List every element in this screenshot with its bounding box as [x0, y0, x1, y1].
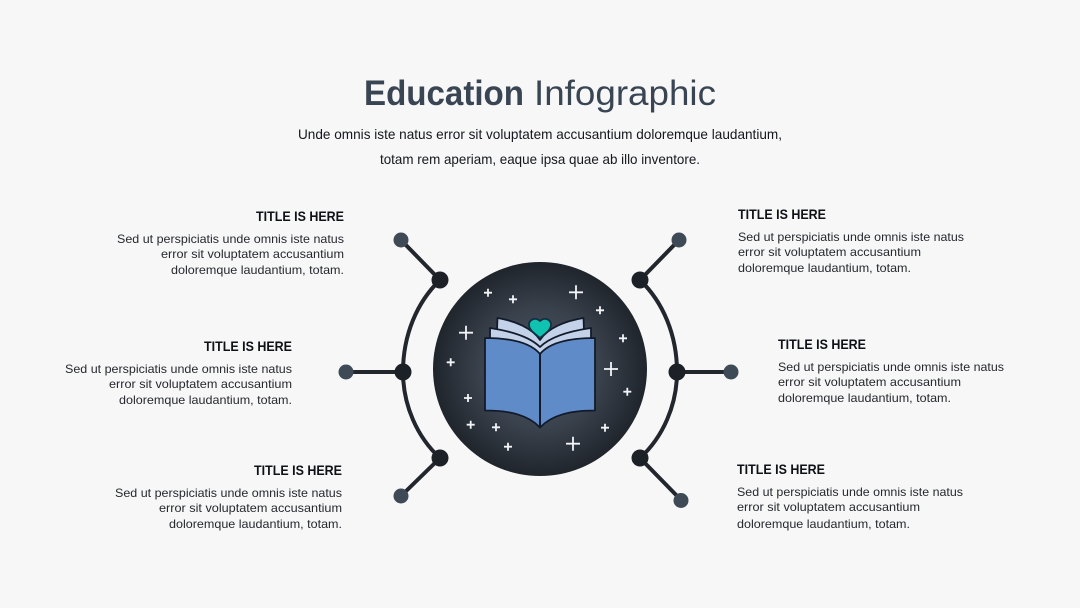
item: bottom right	[737, 461, 963, 531]
item: bottom left: Sed ut perspiciatis unde omnis iste natus	[115, 486, 342, 500]
right connector arc with branches	[632, 232, 738, 508]
item: middle right: TITLE IS HERE	[778, 336, 866, 352]
item: middle left	[65, 338, 292, 407]
item: middle right: error sit voluptatem accusantium	[778, 375, 961, 389]
item: middle right: doloremque laudantium, totam.	[778, 391, 951, 405]
item: bottom left: error sit voluptatem accusantium	[159, 501, 342, 515]
book cover pages	[485, 338, 595, 428]
icon: sparkles	[447, 285, 631, 451]
left connector arc with branches	[338, 232, 448, 504]
item: bottom left: doloremque laudantium, totam.	[169, 517, 342, 531]
item: middle right	[778, 336, 1004, 405]
item: bottom right: TITLE IS HERE	[737, 461, 825, 477]
back pages	[490, 318, 591, 356]
item: top right: doloremque laudantium, totam.	[738, 261, 911, 275]
item: top left	[117, 208, 344, 277]
item: bottom right: error sit voluptatem accusantium	[737, 500, 920, 514]
item: top left: Sed ut perspiciatis unde omnis iste natus	[117, 232, 344, 246]
item: top left: doloremque laudantium, totam.	[171, 263, 344, 277]
item: top right: Sed ut perspiciatis unde omnis iste natus	[738, 230, 964, 244]
title: Education	[364, 74, 524, 113]
item: bottom right: Sed ut perspiciatis unde omnis iste natus	[737, 485, 963, 499]
item: top right	[738, 206, 964, 275]
item: top right: TITLE IS HERE	[738, 206, 826, 222]
item: middle left: Sed ut perspiciatis unde omnis iste natus	[65, 362, 292, 376]
item: middle left: doloremque laudantium, totam.	[119, 393, 292, 407]
item: top left: TITLE IS HERE	[256, 208, 344, 224]
item: bottom left	[115, 462, 342, 531]
item: middle left: error sit voluptatem accusantium	[109, 377, 292, 391]
subtitle: totam rem aperiam, eaque ipsa quae ab illo inventore.	[380, 151, 700, 167]
central dark disc	[433, 262, 647, 476]
book spine	[539, 354, 541, 427]
item: top right: error sit voluptatem accusantium	[738, 245, 921, 259]
item: middle left: TITLE IS HERE	[204, 338, 292, 354]
icon: teal heart	[529, 319, 551, 338]
subtitle: Unde omnis iste natus error sit voluptatem accusantium doloremque laudantium,	[298, 126, 782, 142]
icon: open book	[485, 318, 595, 428]
item: middle right: Sed ut perspiciatis unde omnis iste natus	[778, 360, 1004, 374]
subtitle	[298, 126, 782, 167]
item: bottom left: TITLE IS HERE	[254, 462, 342, 478]
item: top left: error sit voluptatem accusantium	[161, 247, 344, 261]
item: bottom right: doloremque laudantium, totam.	[737, 517, 910, 531]
title: Infographic	[534, 74, 716, 113]
